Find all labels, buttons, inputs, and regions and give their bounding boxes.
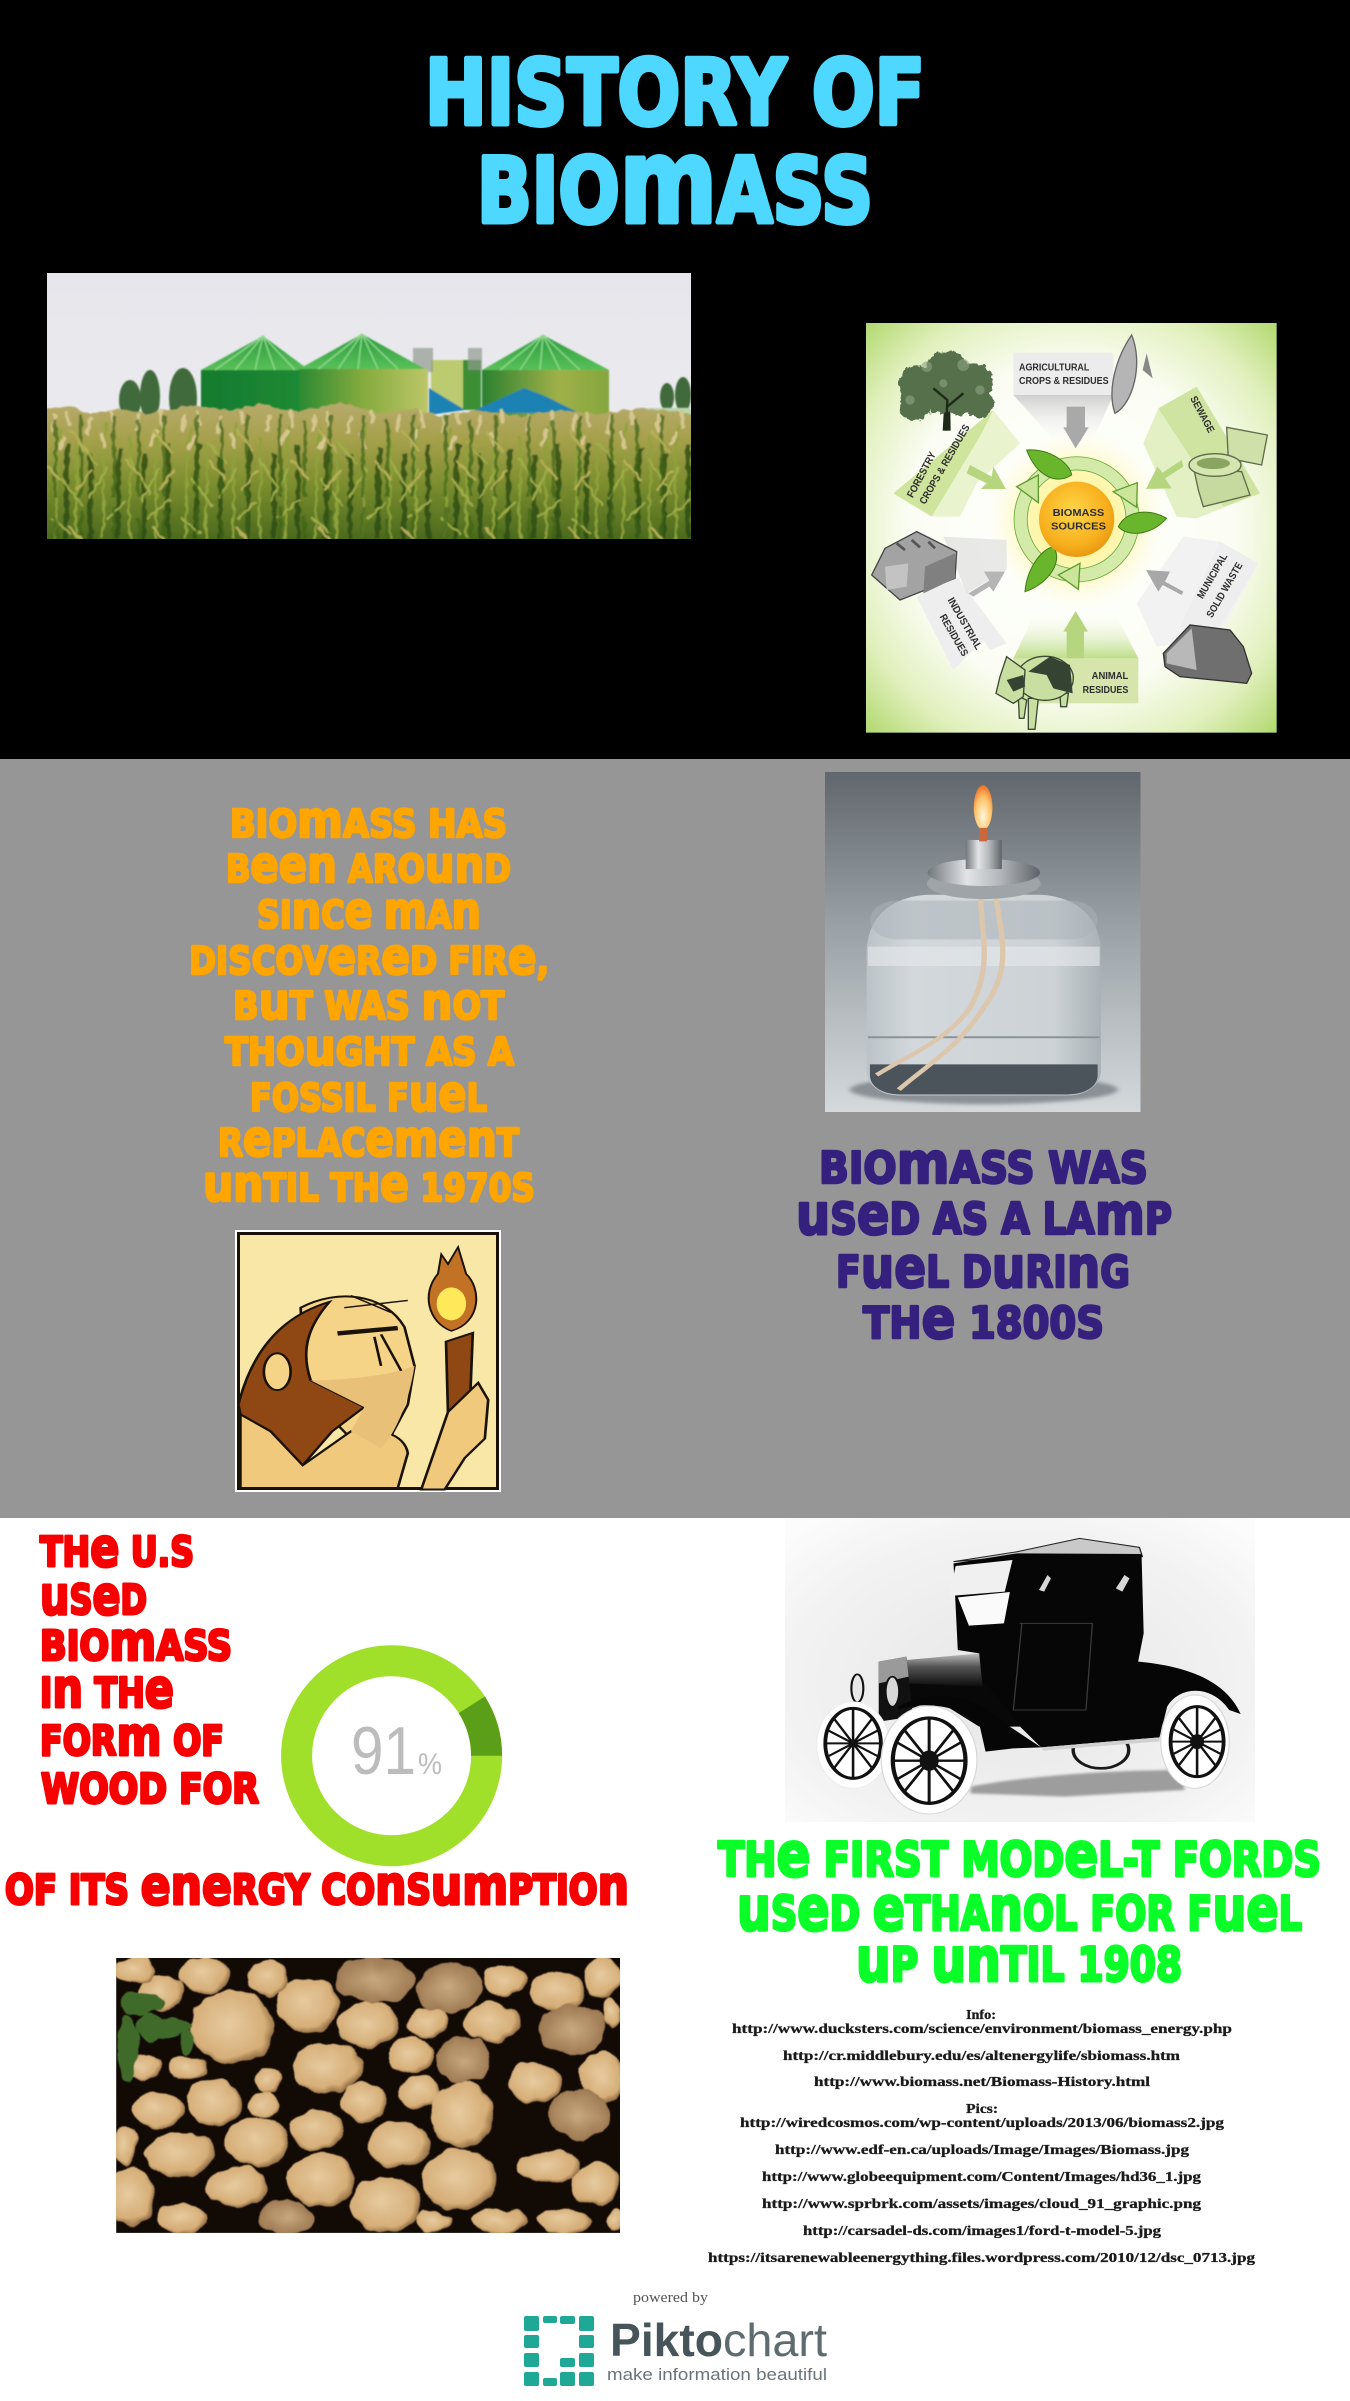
panel: white section: [0, 1517, 1350, 2401]
orange text: biomass and fire: FOSSIL FueL: [250, 1065, 487, 1123]
municipal solid waste: [1137, 537, 1258, 683]
sewage: SEWAGE: [1187, 395, 1216, 435]
title: [425, 41, 925, 250]
sources list: http://cr.middlebury.edu/es/altenergylife/sbiomass.htm: [783, 2049, 1180, 2064]
agricultural crops and residues: CROPS & RESIDUES: [1019, 376, 1109, 387]
torch and hand: [421, 1333, 488, 1489]
silo center: [299, 334, 428, 419]
logo wordmark: make information beautiful: [607, 2365, 827, 2384]
far rear wheel: [1071, 1740, 1130, 1770]
sources list: http://www.biomass.net/Biomass-History.html: [814, 2075, 1150, 2090]
image: caveman with fire: [235, 1230, 501, 1492]
agricultural crops and residues: [1013, 335, 1153, 448]
green text: Model-T: [718, 1820, 1321, 1996]
animal residues: RESIDUES: [1083, 685, 1128, 696]
orange text: biomass and fire: BIOmASS HAS: [230, 791, 507, 849]
sources list: [708, 2008, 1255, 2266]
purple text: lamp fuel: [796, 1131, 1172, 1352]
forestry crops and residues: [893, 351, 1020, 517]
sources list: Info:: [966, 2008, 996, 2023]
powered by label: powered by: [633, 2290, 709, 2306]
sources list: http://www.edf-en.ca/uploads/Image/Images/Biomass.jpg: [775, 2143, 1189, 2158]
radiator: [879, 1657, 913, 1722]
silo left: [201, 336, 309, 420]
purple text: lamp fuel: FueL DuRInG: [836, 1235, 1130, 1301]
distant trees: [118, 367, 691, 416]
municipal solid waste: SOLID WASTE: [1205, 561, 1245, 620]
image: Ford Model T: [785, 1518, 1255, 1822]
sources list: https://itsarenewableenergything.files.wordpress.com/2010/12/dsc_0713.jpg: [708, 2251, 1255, 2266]
forestry crops and residues: FORESTRY: [906, 450, 939, 500]
red text: U.S. wood use: FORm OF: [40, 1706, 224, 1768]
wicks: [877, 891, 1003, 1090]
logo icon: [524, 2316, 594, 2386]
orange text: biomass and fire: DISCOVeReD FIRe,: [189, 928, 549, 986]
image: stacked logs: [105, 1957, 625, 2234]
car body: [851, 1538, 1241, 1752]
orange text: biomass and fire: [189, 791, 549, 1213]
logo wordmark: chart: [723, 2314, 827, 2366]
hood: [906, 1653, 983, 1687]
orange text: biomass and fire: Been AROunD: [226, 836, 511, 894]
rear wheel: [1161, 1695, 1229, 1788]
blue domes: [429, 388, 579, 415]
sources list: http://wiredcosmos.com/wp-content/uploads/2013/06/biomass2.jpg: [740, 2116, 1224, 2131]
donut chart: 91%: %: [418, 1748, 442, 1781]
under hood: [909, 1684, 1020, 1727]
silo right: [482, 335, 609, 420]
forestry crops and residues: CROPS & RESIDUES: [918, 423, 973, 506]
industrial residues: [872, 532, 1007, 670]
large front wheel: [881, 1706, 977, 1814]
small front wheel: [817, 1702, 889, 1788]
middle block: [413, 348, 482, 410]
municipal solid waste: MUNICIPAL: [1196, 552, 1230, 601]
metal burner cap: [927, 840, 1041, 899]
sewage: [1143, 387, 1267, 518]
animal residues: ANIMAL: [1092, 671, 1128, 682]
orange text: biomass and fire: SInCe mAn: [257, 882, 481, 940]
red text: U.S. wood use: THe U.S: [40, 1517, 194, 1579]
red text: U.S. wood use: WOOD FOR: [41, 1765, 259, 1813]
title: HISTORY OF: [425, 41, 925, 146]
flame: [429, 1247, 476, 1331]
Piktochart logo: [524, 2314, 827, 2386]
green text: Model-T: uP unTIL 1908: [856, 1925, 1182, 1996]
corn field: [47, 402, 691, 539]
donut chart: 91%: 91: [351, 1713, 416, 1789]
center circle: biomass sources: BIOMASS: [1053, 508, 1104, 519]
sources list: http://www.sprbrk.com/assets/images/cloud_91_graphic.png: [762, 2197, 1201, 2212]
purple text: lamp fuel: THe 1800S: [863, 1286, 1104, 1352]
orange text: biomass and fire: THOuGHT AS A: [225, 1019, 514, 1077]
orange text: biomass and fire: RePLACemenT: [218, 1110, 520, 1168]
green text: Model-T: uSeD eTHAnOL FOR FueL: [737, 1874, 1302, 1945]
red text: U.S. wood use: In THe: [40, 1658, 174, 1720]
sources list: http://www.globeequipment.com/Content/Images/hd36_1.jpg: [762, 2170, 1201, 2185]
sources list: http://www.ducksters.com/science/environment/biomass_energy.php: [732, 2022, 1232, 2037]
agricultural crops and residues: AGRICULTURAL: [1019, 363, 1089, 374]
recycling arrows and leaves: [1017, 450, 1167, 592]
red text: U.S. wood use: uSeD: [40, 1565, 147, 1627]
front fender: [898, 1696, 1041, 1752]
panel: header: [0, 0, 1350, 759]
industrial residues: RESIDUES: [937, 613, 970, 659]
logo wordmark: Pikto: [610, 2314, 723, 2366]
sources list: http://carsadel-ds.com/images1/ford-t-model-5.jpg: [803, 2224, 1161, 2239]
image: biomass sources diagram: [866, 323, 1277, 733]
ground shadow: [971, 1770, 1184, 1797]
purple text: lamp fuel: BIOmASS WAS: [819, 1131, 1148, 1197]
image: oil lamp: [824, 772, 1140, 1112]
purple text: lamp fuel: uSeD AS A LAmP: [796, 1182, 1172, 1248]
center circle: biomass sources: [1039, 482, 1114, 557]
red text: U.S. wood use: [40, 1517, 259, 1813]
sources list: Pics:: [966, 2102, 998, 2117]
orange text: biomass and fire: BuT WAS nOT: [233, 973, 505, 1031]
caveman figure: [238, 1296, 415, 1488]
title: BIOmASS: [477, 113, 873, 250]
glass jar: [867, 895, 1101, 1095]
animal residues: [996, 610, 1138, 729]
red text: U.S. wood use: BIOmASS: [40, 1611, 232, 1673]
foliage: [118, 1992, 194, 2082]
red text: energy consumption: OF ITS eneRGY COnSumPTIOn: [5, 1855, 629, 1917]
image: biogas silos behind cornfield: [47, 273, 691, 539]
flame: [974, 785, 992, 841]
panel: gray history section: [0, 759, 1350, 1518]
headlamps: [851, 1674, 863, 1702]
donut chart: 91%: [297, 1661, 487, 1851]
industrial residues: INDUSTRIAL: [945, 596, 983, 652]
center circle: biomass sources: SOURCES: [1051, 522, 1106, 533]
orange text: biomass and fire: unTIL THe 1970S: [203, 1155, 535, 1213]
logo wordmark: [607, 2314, 827, 2384]
